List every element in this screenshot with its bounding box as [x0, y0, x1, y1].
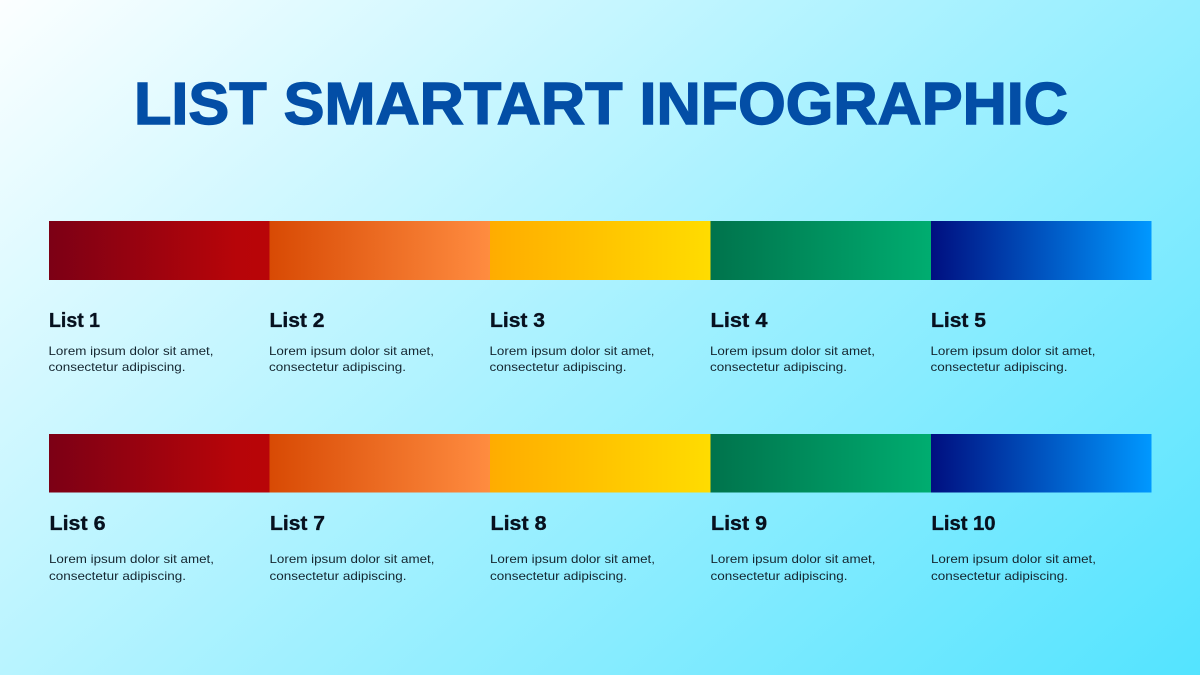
text block: list 5: consectetur adipiscing.: [930, 360, 1068, 374]
text block: list 5: [930, 310, 1096, 374]
segment: list 5: [931, 221, 1152, 280]
text block: list 9: [710, 513, 876, 583]
text block: list 10: [931, 513, 1096, 583]
text block: list 3: [490, 310, 654, 374]
text block: list 8: Lorem ipsum dolor sit amet,: [490, 552, 655, 566]
text block: list 9: consectetur adipiscing.: [710, 569, 848, 583]
text block: list 10: consectetur adipiscing.: [931, 569, 1068, 583]
text block: list 10: Lorem ipsum dolor sit amet,: [931, 552, 1096, 566]
text block: list 1: [48, 310, 214, 374]
segment: list 8: [490, 434, 710, 492]
text block: list 4: Lorem ipsum dolor sit amet,: [710, 344, 875, 358]
text block: list 2: [269, 310, 434, 374]
segment: list 3: [490, 221, 710, 280]
segment: list 10: [931, 434, 1152, 492]
text block: list 2: consectetur adipiscing.: [269, 360, 406, 374]
top colour bar: [49, 221, 1152, 280]
text block: list 1: Lorem ipsum dolor sit amet,: [48, 344, 214, 358]
text block: list 8: consectetur adipiscing.: [490, 569, 627, 583]
text block: list 7: List 7: [270, 513, 325, 535]
text block: list 3: Lorem ipsum dolor sit amet,: [490, 344, 654, 358]
text block: list 6: [49, 513, 214, 583]
text block: list 5: Lorem ipsum dolor sit amet,: [930, 344, 1096, 358]
text block: list 2: List 2: [270, 310, 324, 332]
text block: list 4: [710, 310, 875, 374]
text block: list 1: List 1: [49, 310, 100, 332]
text block: list 7: consectetur adipiscing.: [270, 569, 406, 583]
text block: list 8: List 8: [490, 513, 546, 535]
segment: list 4: [710, 221, 931, 280]
text block: list 3: consectetur adipiscing.: [490, 360, 626, 374]
text block: list 6: consectetur adipiscing.: [49, 569, 186, 583]
title: LIST SMARTART INFOGRAPHIC: [134, 71, 1068, 137]
text block: list 3: List 3: [490, 310, 545, 332]
text block: list 9: List 9: [711, 513, 767, 535]
text block: list 7: [270, 513, 434, 583]
segment: list 7: [270, 434, 490, 492]
segment: list 2: [270, 221, 490, 280]
text block: list 4: List 4: [710, 310, 768, 332]
bottom colour bar: [49, 434, 1152, 492]
segment: list 9: [710, 434, 931, 492]
text block: list 8: [490, 513, 655, 583]
text block: list 10: List 10: [932, 513, 996, 535]
segment: list 1: [49, 221, 270, 280]
text block: list 5: List 5: [931, 310, 986, 332]
text block: list 9: Lorem ipsum dolor sit amet,: [710, 552, 876, 566]
text block: list 4: consectetur adipiscing.: [710, 360, 847, 374]
text block: list 1: consectetur adipiscing.: [48, 360, 186, 374]
text block: list 6: List 6: [50, 513, 106, 535]
text block: list 2: Lorem ipsum dolor sit amet,: [269, 344, 434, 358]
text block: list 6: Lorem ipsum dolor sit amet,: [49, 552, 214, 566]
text block: list 7: Lorem ipsum dolor sit amet,: [270, 552, 434, 566]
segment: list 6: [49, 434, 270, 492]
